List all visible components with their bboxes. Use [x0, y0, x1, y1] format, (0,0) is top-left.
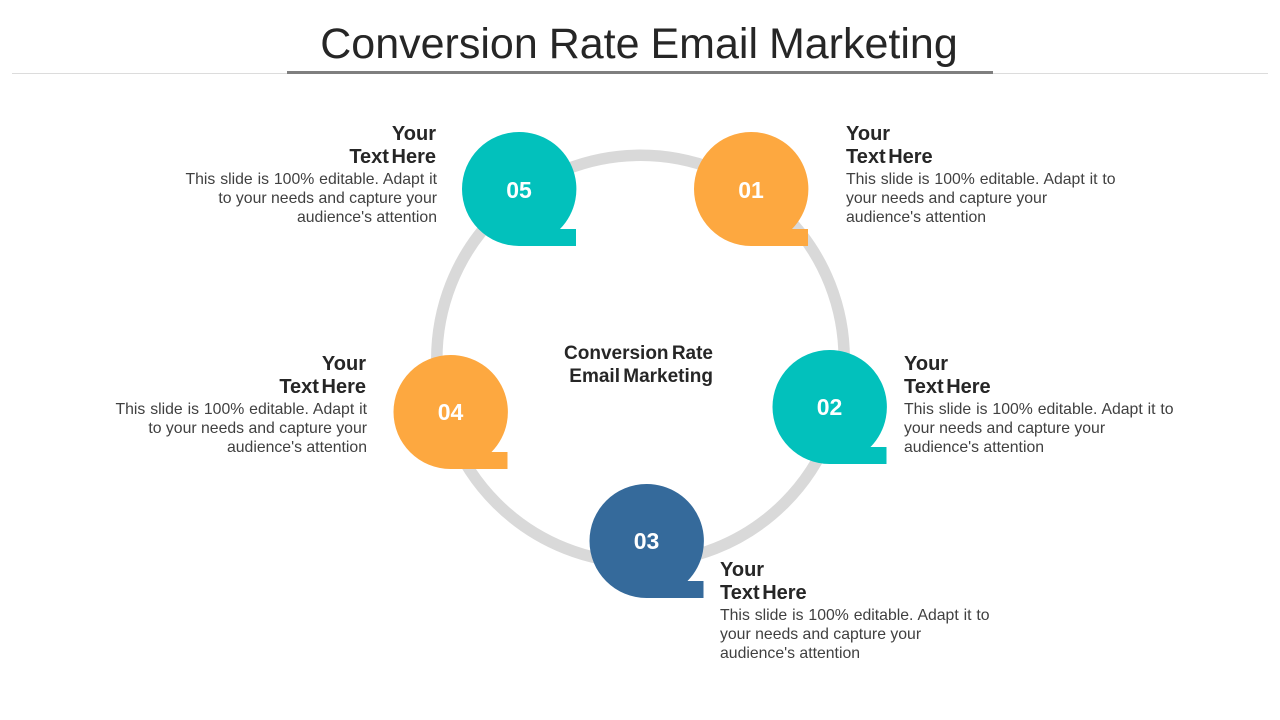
text block 04: This slide is 100% editable. Adapt it: [115, 401, 367, 418]
text block 01: This slide is 100% editable. Adapt it to: [846, 171, 1116, 188]
text block 03: Your: [720, 559, 764, 581]
text block 03: [720, 559, 990, 662]
text block 05: audience's attention: [297, 209, 437, 226]
text block 05: This slide is 100% editable. Adapt it: [185, 171, 437, 188]
bubble 03: [590, 484, 704, 598]
center label: Conversion Rate: [564, 343, 713, 364]
bubble 01: [694, 132, 808, 246]
text block 01: audience's attention: [846, 209, 986, 226]
text block 05: Your: [392, 123, 436, 145]
text block 04: to your needs and capture your: [148, 420, 367, 437]
bubble 04: 04: [438, 399, 463, 425]
bubble 03: 03: [634, 528, 659, 554]
text block 04: Your: [322, 353, 366, 375]
text block 03: This slide is 100% editable. Adapt it to: [720, 607, 990, 624]
bubble 05: [462, 132, 576, 246]
title: Conversion Rate Email Marketing: [320, 20, 958, 68]
ring: [437, 155, 844, 563]
text block 04: Text Here: [279, 376, 366, 398]
center label: Email Marketing: [569, 366, 713, 387]
text block 03: audience's attention: [720, 645, 860, 662]
text block 04: audience's attention: [227, 439, 367, 456]
text block 05: Text Here: [349, 146, 436, 168]
bubble 02: 02: [817, 394, 842, 420]
text block 05: [185, 123, 437, 226]
text block 01: Your: [846, 123, 890, 145]
bubble 01: 01: [738, 177, 764, 203]
text block 02: Text Here: [904, 376, 991, 398]
title underline: [12, 71, 1268, 74]
text block 02: Your: [904, 353, 948, 375]
text block 04: [115, 353, 367, 456]
text block 03: your needs and capture your: [720, 626, 921, 643]
text block 01: your needs and capture your: [846, 190, 1047, 207]
center label: [564, 343, 713, 387]
bubble 02: [772, 350, 887, 464]
text block 02: audience's attention: [904, 439, 1044, 456]
bubble 04: [394, 355, 508, 469]
text block 05: to your needs and capture your: [218, 190, 437, 207]
text block 02: [904, 353, 1174, 456]
text block 02: This slide is 100% editable. Adapt it to: [904, 401, 1174, 418]
bubble 05: 05: [506, 177, 532, 203]
text block 01: Text Here: [846, 146, 933, 168]
text block 02: your needs and capture your: [904, 420, 1105, 437]
text block 03: Text Here: [720, 582, 807, 604]
text block 01: [846, 123, 1116, 226]
